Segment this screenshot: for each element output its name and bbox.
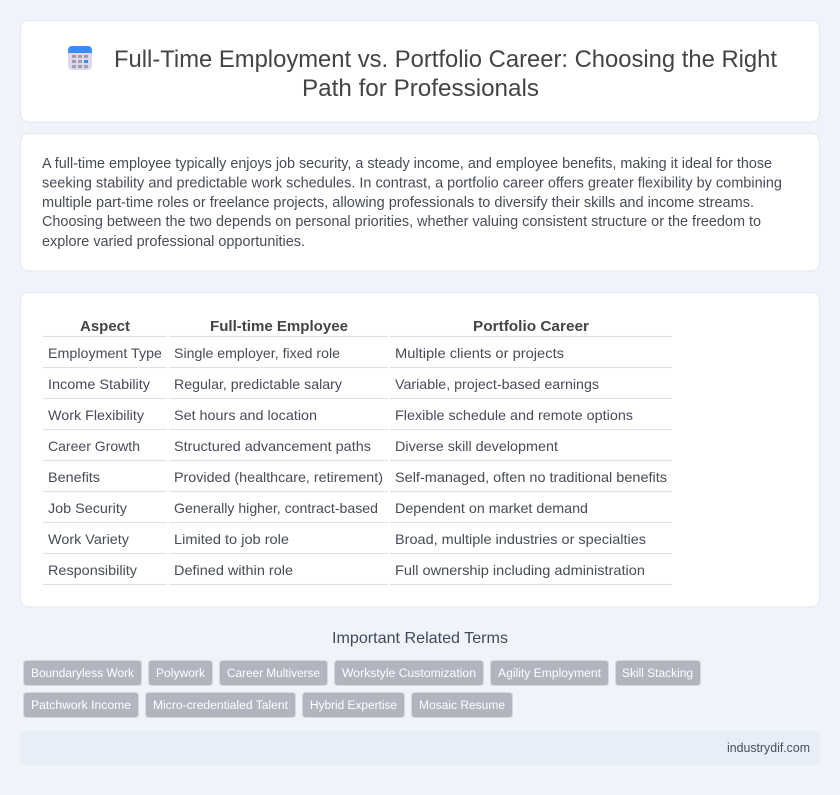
tag: Patchwork Income: Patchwork Income [31,698,131,712]
row: income stability: Regular, predictable salary [174,376,342,392]
row: career growth: Career Growth [48,438,140,454]
row: employment type [48,345,564,361]
row: work flexibility: Set hours and location [174,407,317,423]
panel: introduction text [20,134,820,271]
panel: introduction text: multiple part-time roles or freelance projects, allowing professionals to diversify their skills and income streams. [42,195,754,211]
table header: Aspect [80,319,130,335]
row: responsibility: Full ownership including administration [395,562,645,578]
row: career growth: Diverse skill development [395,438,558,454]
row: job security: Dependent on market demand [395,500,588,516]
row: job security: Job Security [48,500,127,516]
tag: Patchwork Income [24,692,138,718]
tag: Micro-credentialed Talent [146,692,296,718]
row: job security [48,500,588,516]
tag: Workstyle Customization: Workstyle Customization [342,666,476,680]
row: benefits: Provided (healthcare, retirement) [174,469,383,485]
title: Full-Time Employment vs. Portfolio Career: Choosing the Right [114,46,777,73]
row: work flexibility: Work Flexibility [48,407,144,423]
table header: Portfolio Career [473,319,589,335]
row: work flexibility [48,407,633,423]
tag: Micro-credentialed Talent: Micro-credentialed Talent [153,698,289,712]
row: career growth [48,438,558,454]
row: benefits [48,469,667,485]
tag: Career Multiverse: Career Multiverse [227,666,320,680]
panel: introduction text: seeking stability and predictable work schedules. In contrast, a portfolio career offers greater flexibility by combining [42,176,782,192]
panel: comparison table [20,292,820,607]
table header: Full-time Employee [210,319,348,335]
tag: Career Multiverse [220,660,328,686]
tag: Workstyle Customization [334,660,484,686]
tag: Skill Stacking [616,660,700,686]
row: responsibility: Responsibility [48,562,137,578]
row: employment type: Employment Type [48,345,162,361]
related term tags [24,660,700,718]
tag: Mosaic Resume: Mosaic Resume [419,698,505,712]
tag: Agility Employment: Agility Employment [498,666,602,680]
row: responsibility: Defined within role [174,562,293,578]
row: benefits: Self-managed, often no traditional benefits [395,469,667,485]
heading: related terms: Important Related Terms [332,630,508,647]
tag: Polywork: Polywork [156,666,206,680]
footer [20,731,820,765]
row: responsibility [48,562,645,578]
tag: Agility Employment [490,660,608,686]
panel: introduction text: explore varied professional opportunities. [42,234,305,250]
panel: introduction text: Choosing between the two depends on personal priorities, whether valuing consistent structure or the freedom to [42,214,761,230]
row: career growth: Structured advancement paths [174,438,371,454]
tag: Skill Stacking: Skill Stacking [622,666,693,680]
icon: calendar [68,46,92,70]
row: work variety: Limited to job role [174,531,289,547]
row: employment type: Multiple clients or projects [395,345,564,361]
tag: Polywork [148,660,212,686]
tag: Mosaic Resume [412,692,512,718]
row: income stability [48,376,599,392]
footer: industrydif.com [727,741,810,755]
row: work flexibility: Flexible schedule and remote options [395,407,633,423]
table header [80,319,589,335]
panel: header [20,20,820,122]
tag: Boundaryless Work [24,660,142,686]
row: income stability: Variable, project-based earnings [395,376,599,392]
row: income stability: Income Stability [48,376,150,392]
panel: introduction text: A full-time employee typically enjoys job security, a steady income, and employee benefits, making it ideal for those [42,156,772,172]
row: job security: Generally higher, contract-based [174,500,378,516]
tag: Hybrid Expertise [302,692,404,718]
row: work variety: Broad, multiple industries or specialties [395,531,646,547]
title: Path for Professionals [302,75,539,102]
row: work variety: Work Variety [48,531,129,547]
row: employment type: Single employer, fixed role [174,345,340,361]
tag: Boundaryless Work: Boundaryless Work [31,666,135,680]
title [114,46,777,102]
row: work variety [48,531,646,547]
tag: Hybrid Expertise: Hybrid Expertise [310,698,397,712]
row: benefits: Benefits [48,469,100,485]
